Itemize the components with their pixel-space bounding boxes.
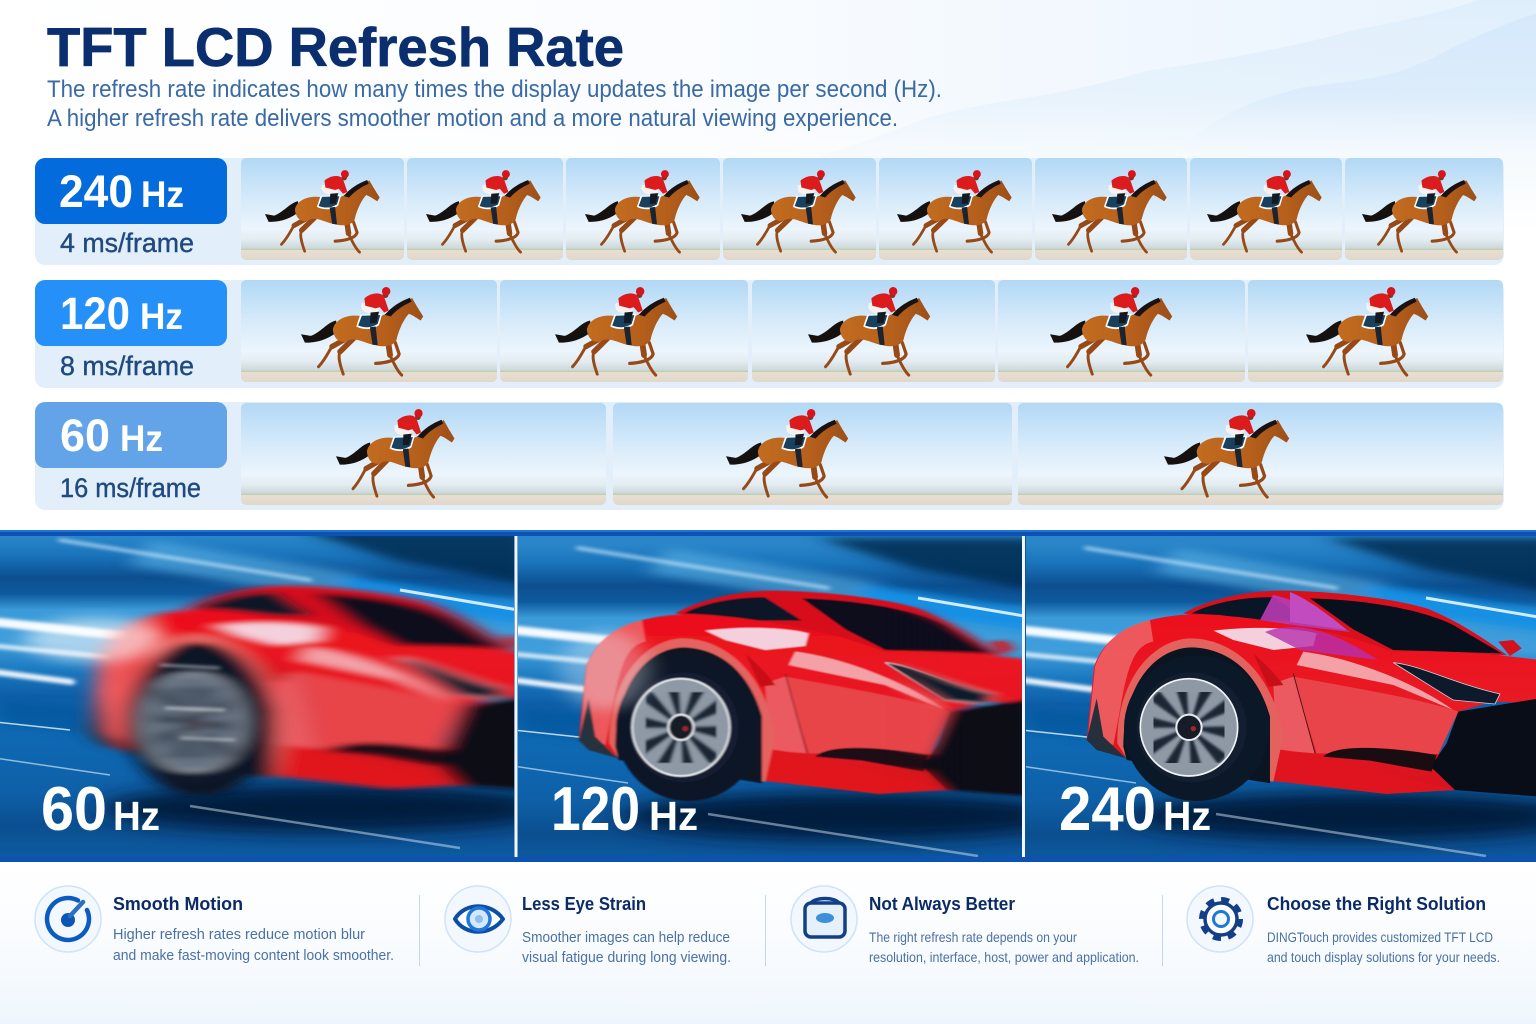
label: 240Hz: Hz xyxy=(1163,793,1211,839)
panel: 60 Hz car xyxy=(0,536,514,857)
label: 120Hz: 120 xyxy=(551,775,640,844)
panel: 120 Hz car xyxy=(510,536,1022,857)
badge: 60 Hz: 60 xyxy=(60,410,110,461)
frame time: 4 ms: 4 ms/frame xyxy=(60,228,194,258)
badge: 60 Hz xyxy=(35,402,227,468)
icon: eye xyxy=(445,886,511,952)
text: Smooth Motion description: Higher refresh rates reduce motion blur xyxy=(113,927,365,943)
badge: 120 Hz: Hz xyxy=(140,296,183,337)
text: Not Always Better description: resolution, interface, host, power and application. xyxy=(869,949,1139,965)
feature: Less Eye Strain xyxy=(445,886,731,966)
panel: 240 Hz row xyxy=(35,158,1504,265)
panel: 60 Hz row xyxy=(35,402,1504,510)
badge: 240 Hz xyxy=(35,158,227,224)
subtitle: A higher refresh rate delivers smoother motion and a more natural viewing experience. xyxy=(47,105,898,132)
panel: 240 Hz car xyxy=(1021,528,1536,888)
heading: Not Always Better: Not Always Better xyxy=(869,894,1015,914)
label: 60Hz xyxy=(43,786,159,830)
frame time: 8 ms: 8 ms/frame xyxy=(60,351,194,381)
header background with swoosh xyxy=(0,0,1536,232)
frame time: 16 ms: 16 ms/frame xyxy=(60,473,201,503)
subtitle: The refresh rate indicates how many times the display updates the image per second (Hz). xyxy=(47,76,942,103)
subtitle xyxy=(47,76,942,132)
text: Smooth Motion description xyxy=(113,927,394,964)
badge: 240 Hz: Hz xyxy=(141,174,184,215)
feature: Not Always Better xyxy=(791,886,1139,965)
label: 120Hz: Hz xyxy=(649,793,698,839)
text: Choose the Right Solution description: DINGTouch provides customized TFT LCD xyxy=(1267,929,1493,945)
text: Not Always Better description: The right refresh rate depends on your xyxy=(869,929,1077,945)
badge: 60 Hz: Hz xyxy=(120,418,163,459)
heading: Smooth Motion: Smooth Motion xyxy=(113,894,243,914)
text: Less Eye Strain description: Smoother images can help reduce xyxy=(522,930,730,946)
panel: 120 Hz row xyxy=(35,280,1504,388)
frames: 60 Hz xyxy=(241,403,1503,505)
label: 120Hz xyxy=(554,786,697,830)
icon: motion target xyxy=(35,886,101,952)
text: Less Eye Strain description xyxy=(522,930,731,966)
text: Choose the Right Solution description: and touch display solutions for your needs. xyxy=(1267,949,1500,965)
label: 240Hz: 240 xyxy=(1059,775,1156,844)
label: 240Hz xyxy=(1061,786,1210,830)
feature: Choose the Right Solution xyxy=(1187,886,1500,965)
label: 60Hz: Hz xyxy=(113,793,160,839)
car comparison band xyxy=(0,520,1536,888)
text: Choose the Right Solution description xyxy=(1267,929,1500,965)
badge: 120 Hz: 120 xyxy=(60,288,130,339)
frames: 120 Hz xyxy=(241,280,1503,382)
text: Less Eye Strain description: visual fatigue during long viewing. xyxy=(522,950,731,966)
footer background xyxy=(0,862,1536,1024)
icon: display xyxy=(791,886,857,952)
badge: 240 Hz: 240 xyxy=(59,166,133,217)
heading: Choose the Right Solution: Choose the Right Solution xyxy=(1267,894,1486,914)
frames: 240 Hz xyxy=(241,158,1503,260)
heading: Less Eye Strain: Less Eye Strain xyxy=(522,894,646,914)
badge: 120 Hz xyxy=(35,280,227,346)
text: Smooth Motion description: and make fast-moving content look smoother. xyxy=(113,948,394,964)
icon: gear xyxy=(1187,886,1253,952)
label: 60Hz: 60 xyxy=(41,775,107,844)
title: TFT LCD Refresh Rate xyxy=(47,16,624,78)
feature: Smooth Motion xyxy=(35,886,394,964)
text: Not Always Better description xyxy=(869,929,1139,965)
